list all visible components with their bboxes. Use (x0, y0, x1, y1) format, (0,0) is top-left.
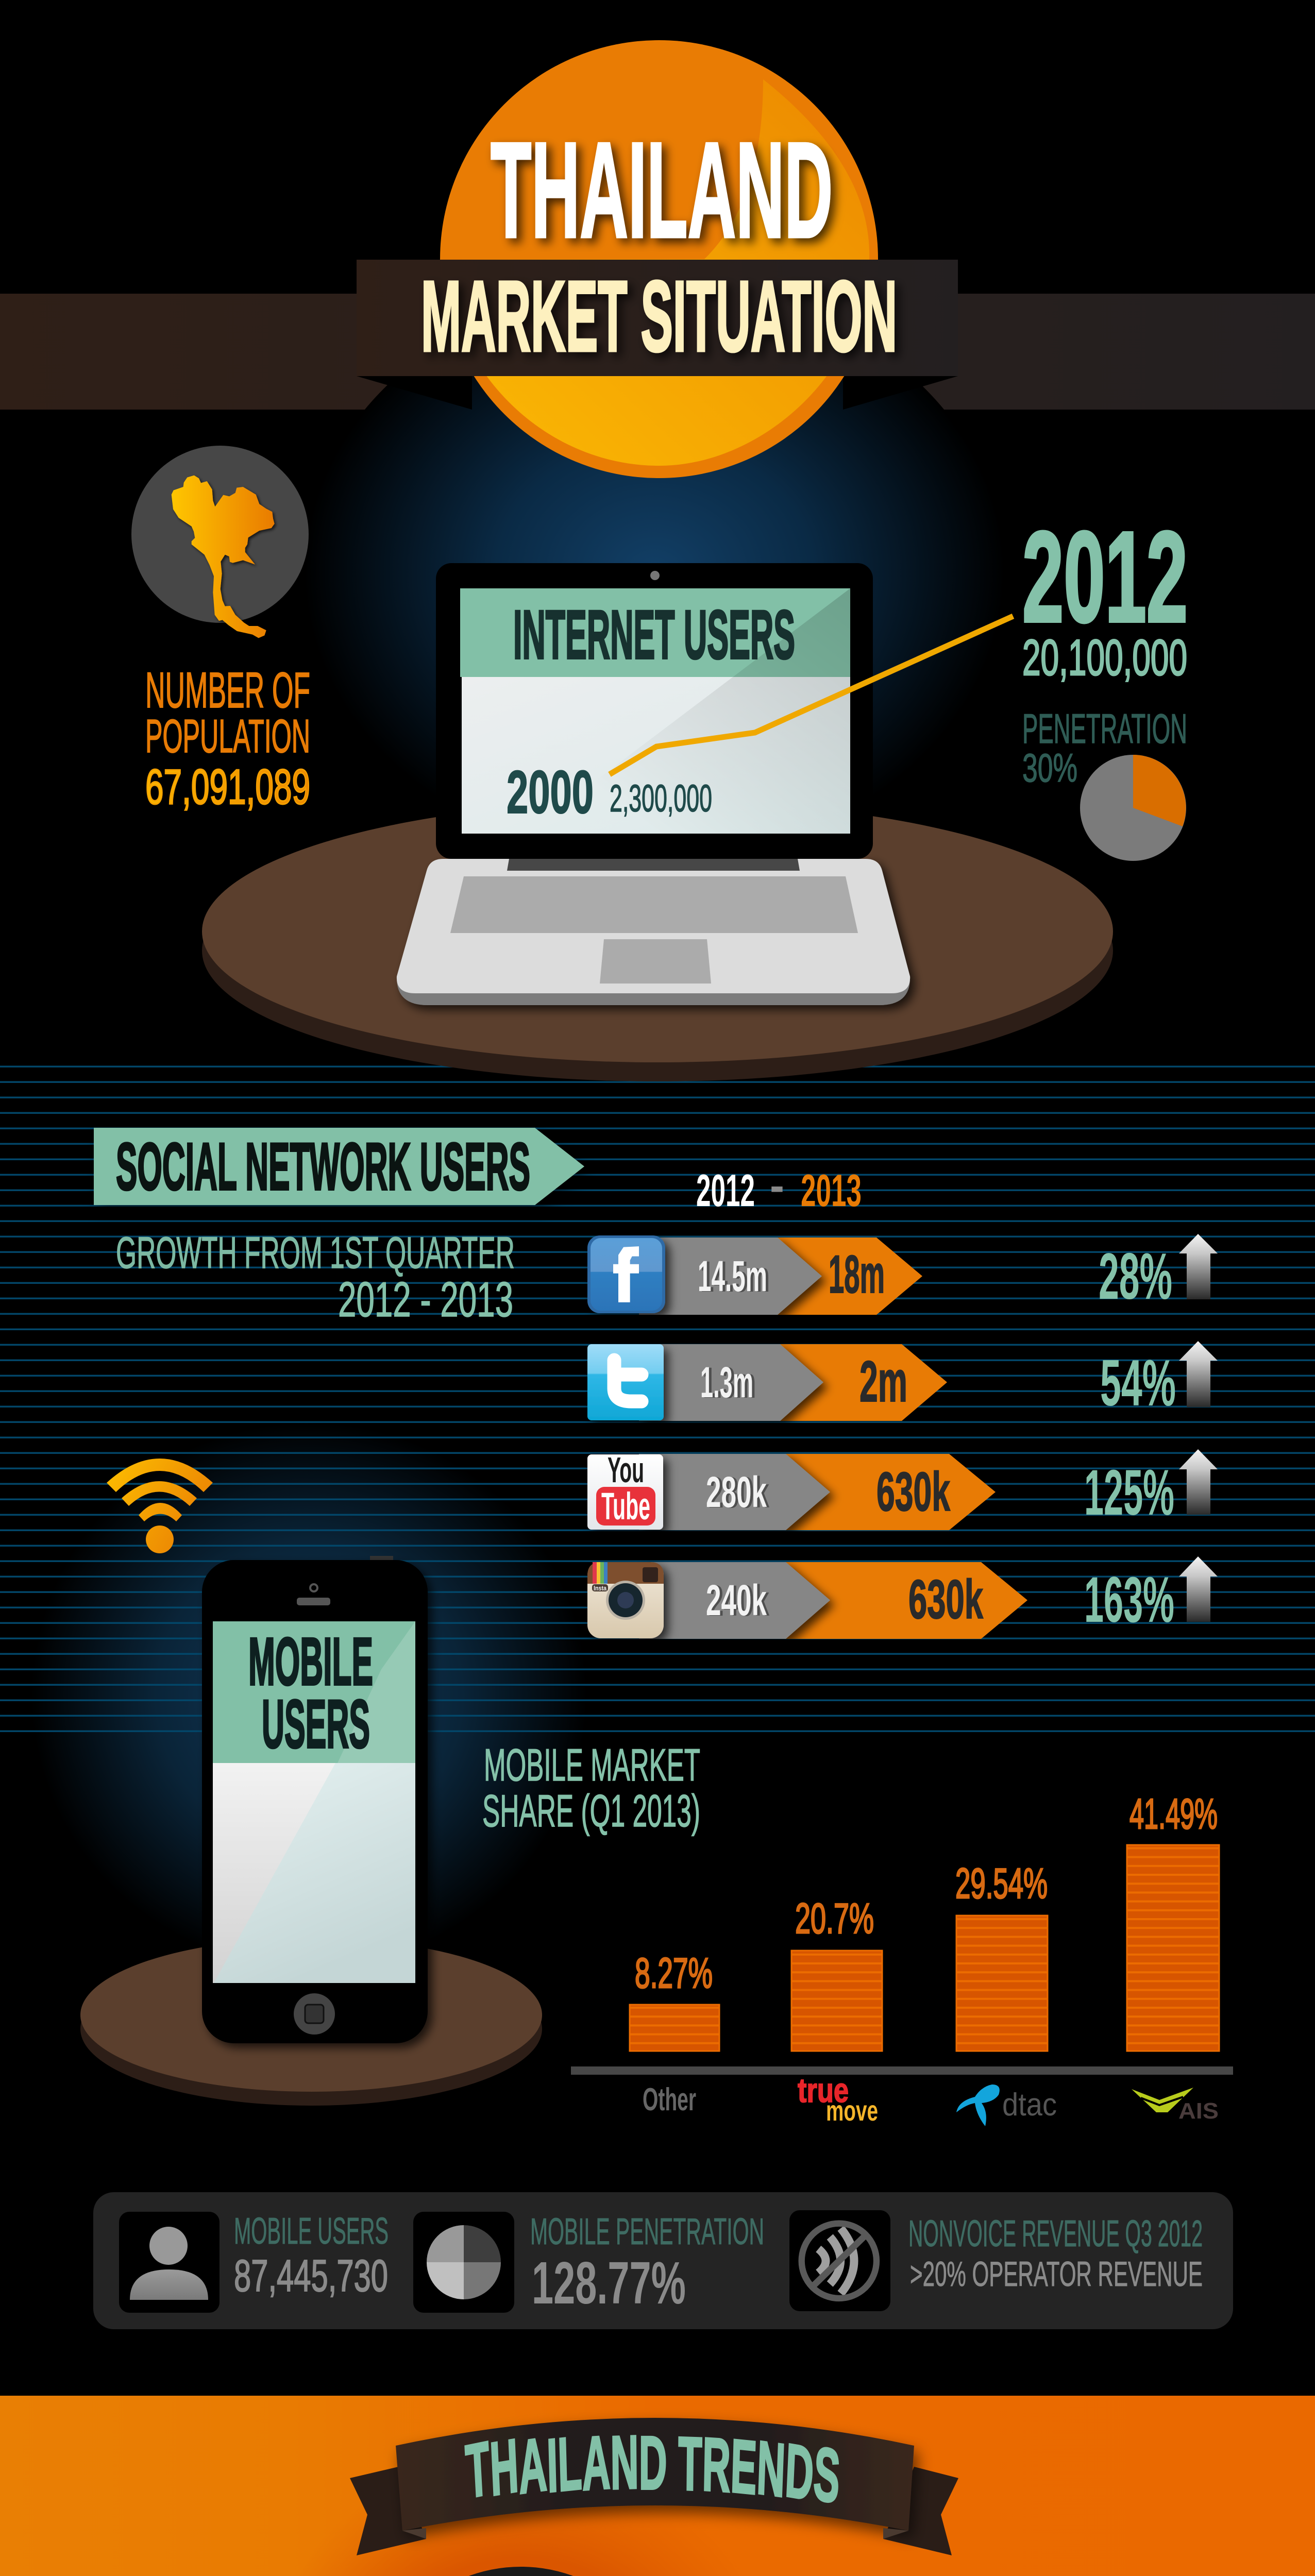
row: youtube: 280k (706, 1468, 767, 1516)
ribbon: thailand trends (350, 2418, 958, 2555)
row: youtube: 630k (876, 1461, 950, 1522)
heading: mobile users (248, 1623, 373, 1762)
value: 2,300,000: 2,300,000 (610, 777, 712, 820)
growth caption: GROWTH FROM 1ST QUARTER (116, 1228, 515, 1278)
smartphone: MOBILE (248, 1623, 373, 1699)
stat: mobile users: MOBILE USERS (234, 2211, 389, 2252)
thumb circle (369, 2567, 672, 2576)
circle behind map (131, 446, 309, 623)
2012 stats (1022, 505, 1188, 686)
ribbon folds (357, 376, 958, 410)
smartphone (202, 1556, 428, 2043)
icon: wifi (107, 1459, 213, 1553)
trackpad (600, 939, 711, 984)
row: twitter (587, 1341, 1218, 1421)
title block (357, 40, 958, 478)
screen (462, 677, 850, 834)
market share heading: MOBILE MARKET (484, 1739, 700, 1790)
laptop: INTERNET USERS (513, 597, 795, 673)
ribbon tails (350, 2467, 958, 2555)
row: facebook (587, 1234, 1218, 1315)
laptop base (397, 859, 910, 1005)
penetration label (1022, 706, 1187, 790)
screen bezel (436, 563, 873, 859)
label: number of population (145, 662, 310, 815)
stat: mobile penetration: MOBILE PENETRATION (530, 2211, 764, 2252)
phone header (213, 1621, 415, 1763)
blue glow behind laptop (304, 283, 1005, 860)
penetration label: 30% (1022, 745, 1077, 790)
row: facebook: 18m (829, 1245, 885, 1304)
trends orange panel (0, 2396, 1315, 2576)
smartphone: USERS (262, 1686, 370, 1762)
growth caption: 2012 - 2013 (338, 1272, 513, 1327)
phone body (202, 1560, 428, 2043)
row: youtube: 125% (1084, 1457, 1174, 1529)
label: number of population: 67,091,089 (145, 759, 310, 815)
ribbon arch (396, 2418, 914, 2531)
row: facebook: 14.5m (698, 1252, 767, 1300)
row: facebook: 28% (1099, 1240, 1172, 1313)
2012 stats: 2012 (1022, 505, 1188, 649)
penetration label: PENETRATION (1022, 706, 1187, 752)
row: instagram: 240k (706, 1576, 767, 1624)
row: twitter: 54% (1100, 1346, 1176, 1419)
year legend: 2013 (801, 1165, 862, 1216)
dark glows (98, 2450, 1230, 2576)
phone screen (213, 1763, 415, 1983)
logo: AIS (1132, 2088, 1219, 2124)
table under phone (80, 1938, 542, 2106)
row: instagram: 630k (908, 1568, 983, 1630)
icon: instagram (587, 1562, 664, 1638)
stat: mobile penetration (530, 2211, 764, 2316)
keyboard (450, 876, 858, 933)
bar chart: market share: 29.54% (955, 1859, 1048, 1907)
ribbon fold shades (402, 2528, 908, 2539)
stat: mobile users (234, 2211, 389, 2301)
heading arrow: social network users (94, 1128, 584, 1205)
screen reflection (526, 588, 850, 834)
row: instagram: 163% (1084, 1564, 1174, 1636)
row: instagram (587, 1556, 1218, 1639)
icon: youtube (587, 1450, 663, 1530)
stats panel (93, 2192, 1233, 2329)
year legend: - (770, 1160, 784, 1211)
label: number of population: POPULATION (145, 710, 310, 762)
title block: THAILAND (491, 114, 833, 266)
label: number of population: NUMBER OF (145, 662, 310, 718)
2012 stats: 20,100,000 (1022, 629, 1187, 686)
bar chart: market share: 8.27% (635, 1949, 713, 1997)
growth caption (116, 1228, 515, 1327)
icon: instagram: Insta (594, 1584, 607, 1592)
market share heading (482, 1739, 700, 1836)
webcam (650, 571, 660, 580)
icon: no voice (789, 2210, 890, 2311)
pie chart: penetration 30% (1080, 755, 1186, 861)
label: 2000: 2000 (507, 758, 594, 826)
home button (294, 1993, 335, 2035)
icon: Thailand map (172, 476, 275, 638)
growth line (610, 616, 1013, 774)
stat: mobile penetration: 128.77% (532, 2249, 686, 2316)
screen header (460, 588, 850, 677)
icon: youtube: You (608, 1450, 644, 1490)
heading: thailand trends: THAILAND TRENDS (464, 2419, 842, 2519)
ribbon centre (357, 260, 958, 376)
icon: pie quadrants (413, 2212, 514, 2313)
horizontal scan lines (0, 1065, 1315, 1733)
stat: mobile users: 87,445,730 (234, 2251, 388, 2301)
table under laptop (202, 801, 1113, 1081)
bar chart: market share (571, 1790, 1233, 2127)
logo: AIS: AIS (1178, 2098, 1219, 2124)
icon: twitter (587, 1344, 664, 1420)
row: youtube (587, 1449, 1218, 1530)
heading arrow: social network users: SOCIAL NETWORK USERS (116, 1129, 530, 1204)
hinge (507, 859, 800, 871)
icon: person (119, 2212, 220, 2313)
icon: youtube: Tube (601, 1485, 650, 1528)
logo: dtac: dtac (1002, 2087, 1057, 2123)
year legend (696, 1160, 862, 1216)
logo: dtac (956, 2084, 1057, 2126)
market share heading: SHARE (Q1 2013) (482, 1785, 700, 1836)
icon: facebook (587, 1235, 665, 1313)
orange sun circle (440, 40, 878, 478)
row: twitter: 2m (859, 1349, 907, 1414)
row: twitter: 1.3m (700, 1358, 753, 1406)
bar chart: market share: 41.49% (1129, 1790, 1218, 1838)
logo: true move: true (798, 2071, 849, 2109)
laptop (397, 563, 910, 1005)
2012 grey arrow (639, 1238, 822, 1315)
2013 orange arrow (778, 1238, 922, 1315)
population block (131, 446, 310, 815)
phone glow (31, 1422, 587, 1968)
header banner side bands (0, 294, 1315, 410)
year legend: 2012 (696, 1165, 755, 1216)
label: Other: Other (643, 2082, 696, 2117)
stat: nonvoice revenue (908, 2213, 1203, 2294)
bar chart: market share: 20.7% (795, 1894, 874, 1942)
phone side button (370, 1556, 393, 1561)
logo: true move (798, 2071, 878, 2127)
logo: true move: move (826, 2094, 878, 2127)
